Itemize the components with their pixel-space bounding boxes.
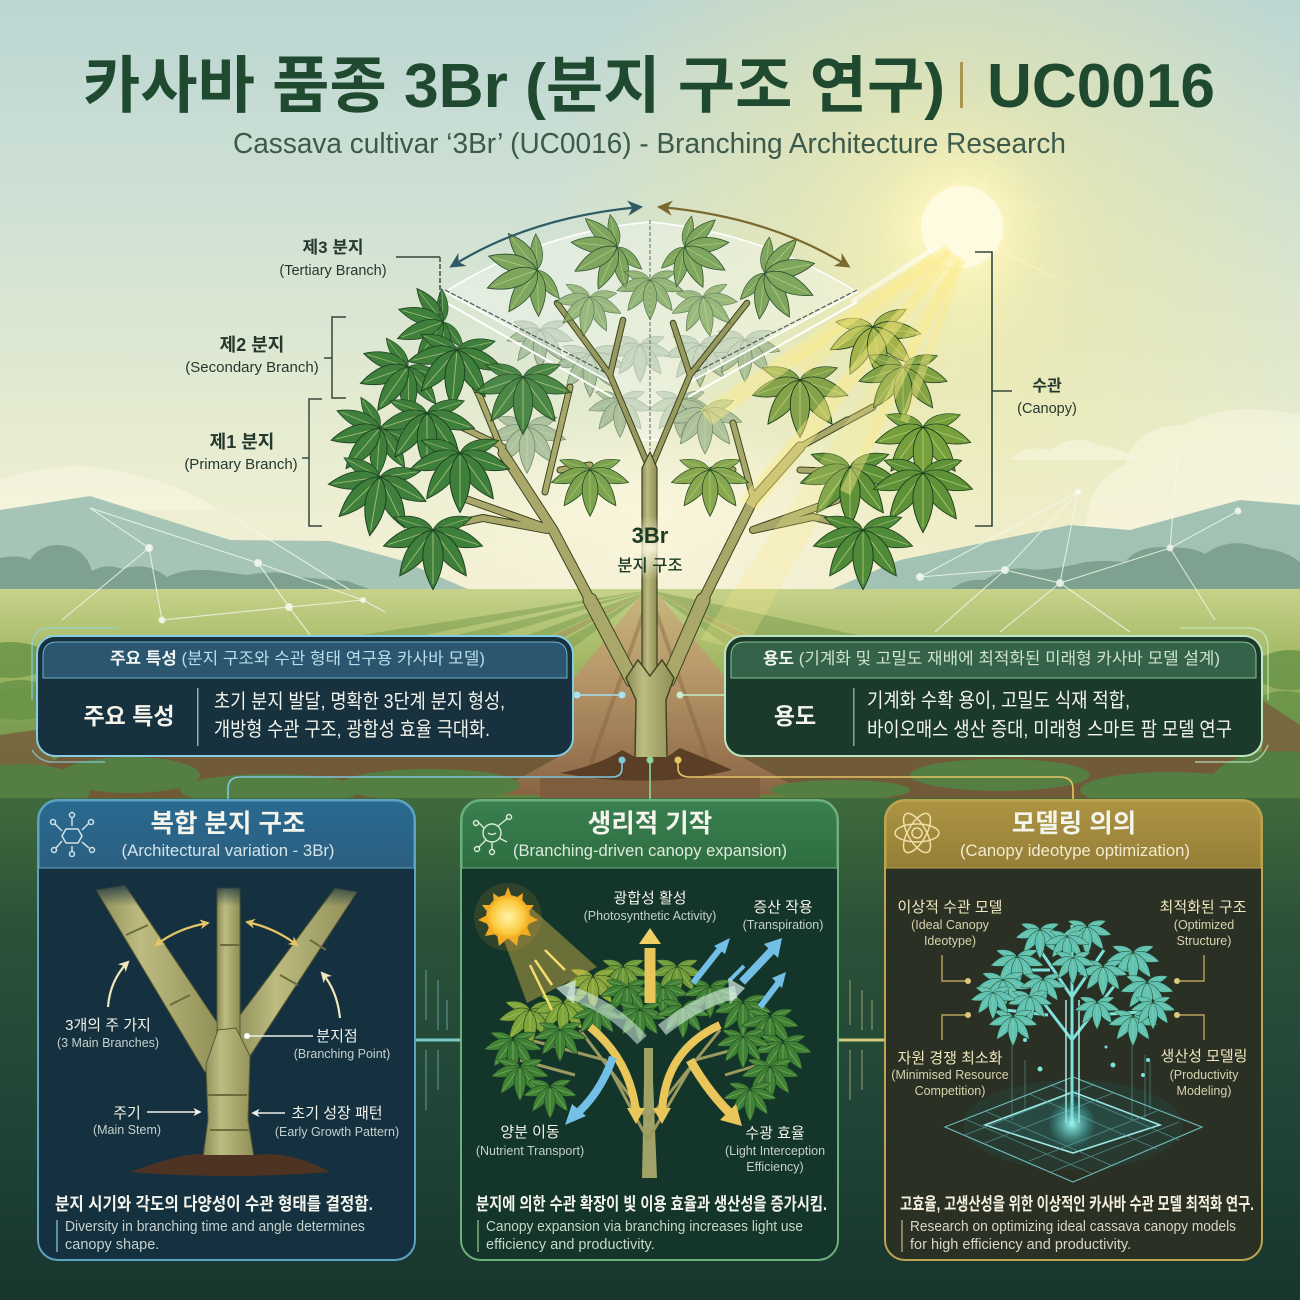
heading: 용도 [774,703,816,729]
connectors [942,955,1204,1040]
left foliage [310,277,631,590]
header band [731,642,1256,678]
title: 카사바 품종 3Br (분지 구조 연구) [83,52,945,121]
header band [43,642,567,678]
upper leaves [471,202,833,342]
panel header: 생리적 기작 [588,810,712,838]
callouts: 분지점 [316,1028,358,1045]
description [476,1194,827,1253]
callouts: (Early Growth Pattern) [275,1125,399,1139]
callouts: Ideotype) [924,934,976,948]
header band: 주요 특성 (분지 구조와 수관 형태 연구용 카사바 모델) [110,649,485,668]
callouts: 광합성 활성 [613,890,687,907]
label: 3Br center: 3Br [632,523,669,548]
callouts: Modeling) [1177,1084,1231,1098]
panel header: 모델링 의의 [1012,810,1136,838]
callouts: (Photosynthetic Activity) [584,909,716,923]
callouts: 양분 이동 [500,1124,560,1141]
panel header [462,801,837,868]
description [900,1194,1254,1253]
callouts: 자원 경쟁 최소화 [898,1050,1003,1067]
subtitle: Cassava cultivar ‘3Br’ (UC0016) - Branching Architecture Research [233,128,1066,160]
text [214,690,505,741]
callouts: (Transpiration) [743,918,823,932]
label: canopy: (Canopy) [1017,401,1077,417]
arrows: flows [556,928,786,1126]
label: tertiary branch [279,238,440,316]
diagram: plant [483,957,813,1178]
label: secondary branch [185,317,346,398]
ghost upper leaves [486,317,782,473]
label: secondary branch: (Secondary Branch) [185,359,319,376]
panel header: (Branching-driven canopy expansion) [513,841,787,860]
label: primary branch [184,399,322,526]
callouts: Efficiency) [746,1160,804,1174]
callouts: 최적화된 구조 [1160,899,1247,916]
farmland shrubs [0,642,1300,739]
callouts [891,899,1247,1098]
label: primary branch: 제1 분지 [210,432,274,452]
icon: network [50,812,94,856]
panel header: 복합 분지 구조 [151,810,305,838]
description: 분지 시기와 각도의 다양성이 수관 형태를 결정함. [55,1194,373,1214]
callouts: 주기 [113,1105,141,1122]
panel: uses [725,628,1268,762]
callouts [57,1017,399,1139]
text [867,689,1232,741]
callouts: (Branching Point) [294,1047,390,1061]
icon: cell [474,814,512,854]
angle arrows [452,207,848,266]
callouts: 수광 효율 [745,1125,805,1142]
label: 3Br center: 분지 구조 [617,556,683,575]
description: 분지에 의한 수관 확장이 빛 이용 효율과 생산성을 증가시킴. [476,1194,827,1214]
panel header: (Canopy ideotype optimization) [960,841,1190,860]
description [55,1194,373,1253]
arrows: angles [108,922,340,1113]
callouts: 이상적 수관 모델 [898,899,1002,916]
branches [440,303,880,680]
diagram: digital tree on grid [945,918,1202,1182]
callouts: Competition) [915,1084,985,1098]
heading: 주요 특성 [83,703,175,729]
header band: 용도 (기계화 및 고밀도 재배에 최적화된 미래형 카사바 모델 설계) [763,649,1220,668]
label: secondary branch: 제2 분지 [220,335,284,355]
title: UC0016 [987,52,1215,121]
panel: architectural variation [38,800,415,1260]
callouts: 생산성 모델링 [1161,1048,1247,1065]
callouts: (Minimised Resource [891,1068,1009,1082]
connector lines [228,692,1073,800]
callouts: (Productivity [1170,1068,1239,1082]
callouts: (Light Interception [725,1144,825,1158]
right foliage [669,301,975,590]
callouts [476,890,825,1174]
callouts: (Optimized [1174,918,1234,932]
text: 개방형 수관 구조, 광합성 효율 극대화. [214,718,490,741]
text: 바이오매스 생산 증대, 미래형 스마트 팜 모델 연구 [867,718,1232,741]
text: 기계화 수확 용이, 고밀도 식재 적합, [867,689,1130,712]
description: canopy shape. [65,1237,159,1253]
panel header [39,801,414,868]
callouts: (3 Main Branches) [57,1036,159,1050]
icon: atom [895,809,939,857]
sun rays over canopy [700,245,966,650]
panel: key traits [32,628,573,762]
callouts: (Main Stem) [93,1123,161,1137]
text: 초기 분지 발달, 명확한 3단계 분지 형성, [214,690,505,713]
label: tertiary branch: (Tertiary Branch) [279,263,387,279]
label: 3Br center [600,516,700,580]
callouts: (Ideal Canopy [911,918,990,932]
callouts: 초기 성장 패턴 [291,1105,383,1122]
label: primary branch: (Primary Branch) [184,456,298,473]
callouts: 증산 작용 [753,899,813,916]
description: Diversity in branching time and angle determines [65,1219,365,1235]
glass canopy [445,222,857,440]
network lines in the landscape [62,450,1241,635]
description: Canopy expansion via branching increases light use [486,1219,803,1235]
description: efficiency and productivity. [486,1237,655,1253]
panel: modeling significance [885,800,1262,1260]
panel header: (Architectural variation - 3Br) [122,841,334,860]
label: tertiary branch: 제3 분지 [302,238,364,257]
callouts: Structure) [1177,934,1231,948]
description: Research on optimizing ideal cassava canopy models [910,1219,1236,1235]
panel links: glowing streaks [415,970,885,1110]
panel header [886,801,1261,868]
icon: sun with beam [474,883,597,1010]
cassava tree [310,202,975,781]
label: canopy [975,252,1077,526]
callouts: (Nutrient Transport) [476,1144,584,1158]
sun [877,142,1100,330]
diagram: branches [90,880,360,1176]
panel: physiological mechanism [461,800,838,1260]
label: canopy: 수관 [1032,377,1062,395]
description: for high efficiency and productivity. [910,1237,1131,1253]
callouts: 3개의 주 가지 [65,1017,151,1034]
